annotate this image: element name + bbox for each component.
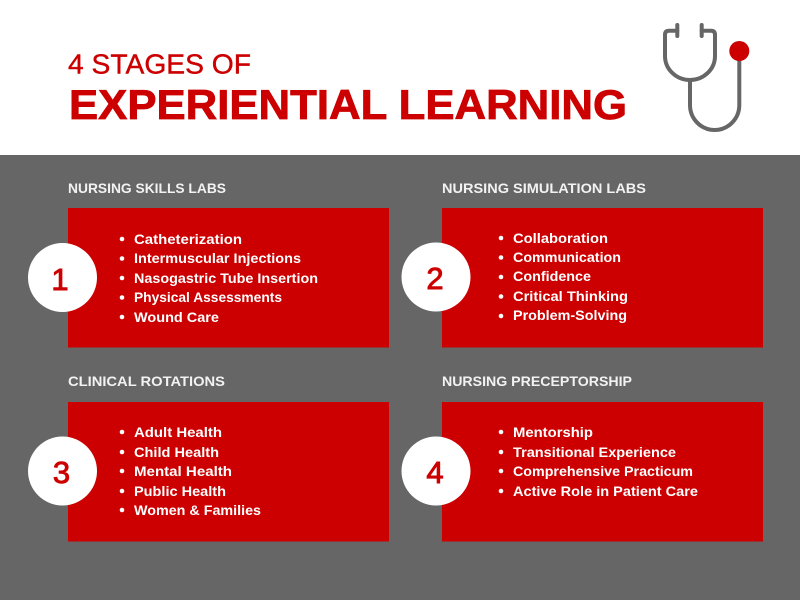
list: clinical rotations: Women & Families — [134, 502, 261, 518]
list: skills labs: Wound Care — [134, 309, 219, 325]
list: preceptorship: Transitional Experience — [513, 444, 676, 460]
title: EXPERIENTIAL LEARNING — [69, 81, 627, 128]
number badge 2: 2 — [426, 261, 444, 296]
list: skills labs: Catheterization — [134, 231, 242, 247]
title — [68, 48, 627, 128]
list: preceptorship: Active Role in Patient Care — [513, 483, 698, 499]
panel: nursing skills labs — [28, 180, 389, 348]
list: skills labs — [120, 231, 318, 325]
list: clinical rotations: Adult Health — [134, 424, 222, 440]
list: clinical rotations: Mental Health — [134, 463, 232, 479]
number badge 1: 1 — [51, 262, 69, 297]
number badge 3 — [28, 436, 97, 506]
heading: nursing preceptorship: NURSING PRECEPTORSHIP — [442, 373, 632, 389]
list: preceptorship — [499, 424, 698, 499]
number badge 4: 4 — [426, 455, 444, 490]
title: 4 STAGES OF — [68, 48, 251, 80]
panel: nursing preceptorship — [402, 373, 763, 542]
list: simulation labs: Confidence — [513, 268, 591, 284]
list: simulation labs: Critical Thinking — [513, 288, 628, 304]
number badge 3: 3 — [53, 455, 70, 490]
heading: nursing skills labs: NURSING SKILLS LABS — [68, 180, 226, 196]
list: simulation labs — [499, 230, 628, 323]
list: clinical rotations: Child Health — [134, 444, 219, 460]
list: preceptorship: Comprehensive Practicum — [513, 463, 693, 479]
list: skills labs: Physical Assessments — [134, 289, 282, 305]
list: skills labs: Intermuscular Injections — [134, 250, 301, 266]
list: skills labs: Nasogastric Tube Insertion — [134, 270, 318, 286]
heading: clinical rotations: CLINICAL ROTATIONS — [68, 373, 225, 389]
panel: clinical rotations — [28, 373, 389, 542]
list: simulation labs: Collaboration — [513, 230, 608, 246]
list: clinical rotations — [120, 424, 261, 518]
list: simulation labs: Communication — [513, 249, 621, 265]
list: clinical rotations: Public Health — [134, 483, 226, 499]
heading: nursing simulation labs: NURSING SIMULATION LABS — [442, 180, 646, 196]
icon: stethoscope — [665, 25, 749, 130]
number badge 1 — [28, 243, 97, 312]
panel: nursing simulation labs — [402, 180, 763, 348]
list: preceptorship: Mentorship — [513, 424, 593, 440]
number badge 2 — [402, 242, 470, 312]
number badge 4 — [402, 436, 470, 506]
list: simulation labs: Problem-Solving — [513, 307, 627, 323]
